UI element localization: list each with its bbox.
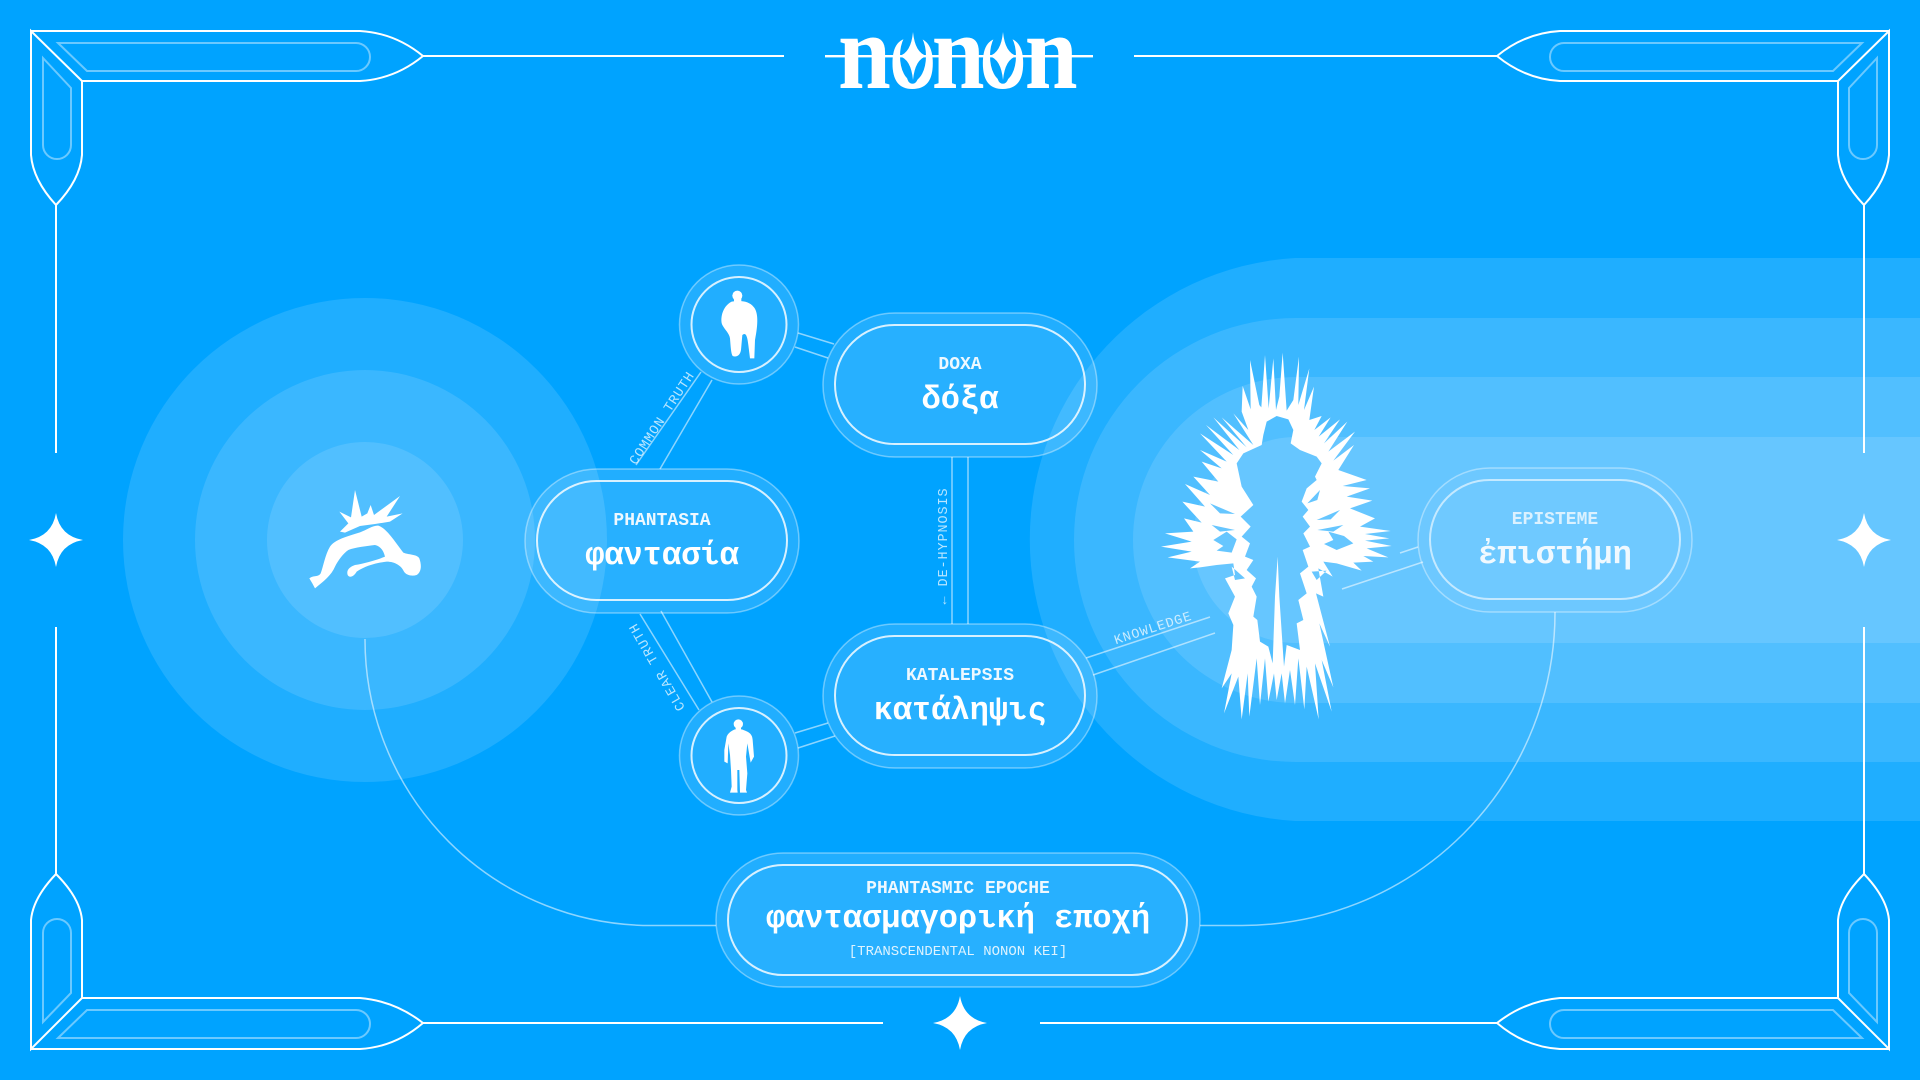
frame corner: bottom right xyxy=(1497,874,1889,1049)
icon: standing figure xyxy=(724,719,754,793)
greek: katalepsis: κατάληψις xyxy=(874,692,1046,729)
label: phantasmic epoche: PHANTASMIC EPOCHE xyxy=(866,879,1050,899)
sublabel: transcendental nonon kei: [TRANSCENDENTAL NONON KEI] xyxy=(849,944,1067,960)
connector: doxa to katalepsis xyxy=(952,457,968,624)
label: knowledge: KNOWLEDGE xyxy=(1113,610,1194,649)
light bands behind radiant figure xyxy=(1030,258,1920,821)
label: common truth: COMMON TRUTH xyxy=(628,369,699,468)
node: top circle with heavy figure xyxy=(680,265,798,384)
icon: fallen arched figure with crown xyxy=(309,490,421,588)
greek: phantasmic epoche: φαντασμαγορική εποχή xyxy=(766,900,1150,937)
star: bottom centre xyxy=(933,996,987,1050)
label: episteme: EPISTEME xyxy=(1512,510,1598,530)
pill: phantasia xyxy=(525,469,799,613)
pill: phantasmic epoche xyxy=(716,853,1200,987)
label: phantasia: PHANTASIA xyxy=(613,511,711,531)
greek: doxa: δόξα xyxy=(922,381,999,418)
label: clear truth: CLEAR TRUTH xyxy=(627,620,690,713)
greek: episteme: ἐπιστήμη xyxy=(1478,536,1632,573)
pill: doxa xyxy=(823,313,1097,457)
pill: episteme xyxy=(1418,468,1692,612)
connector curves to phantasmic epoche xyxy=(365,612,1555,926)
connector: katalepsis to figure xyxy=(1086,617,1215,675)
concentric glow behind fallen figure xyxy=(123,298,607,782)
connector: phantasia to top circle xyxy=(636,372,712,469)
icon: radiant spiky human figure xyxy=(1161,353,1392,719)
frame corner: top right xyxy=(1497,31,1889,205)
label: doxa: DOXA xyxy=(938,355,982,375)
label: katalepsis: KATALEPSIS xyxy=(906,666,1014,686)
icon: heavy figure xyxy=(721,291,757,358)
connector: phantasia to bottom circle xyxy=(640,611,712,710)
node: bottom circle with standing figure xyxy=(680,696,798,815)
connector: figure to episteme xyxy=(1342,547,1423,589)
frame corner: top left xyxy=(31,31,423,205)
greek: phantasia: φαντασία xyxy=(585,537,740,574)
frame corner: bottom left xyxy=(31,874,423,1049)
connector: bottom circle to katalepsis xyxy=(795,723,835,748)
star: left xyxy=(29,513,83,567)
star: right xyxy=(1837,513,1891,567)
pill: katalepsis xyxy=(823,624,1097,768)
label: de-hypnosis: ← DE-HYPNOSIS xyxy=(937,487,952,605)
connector: top circle to doxa xyxy=(795,333,834,358)
